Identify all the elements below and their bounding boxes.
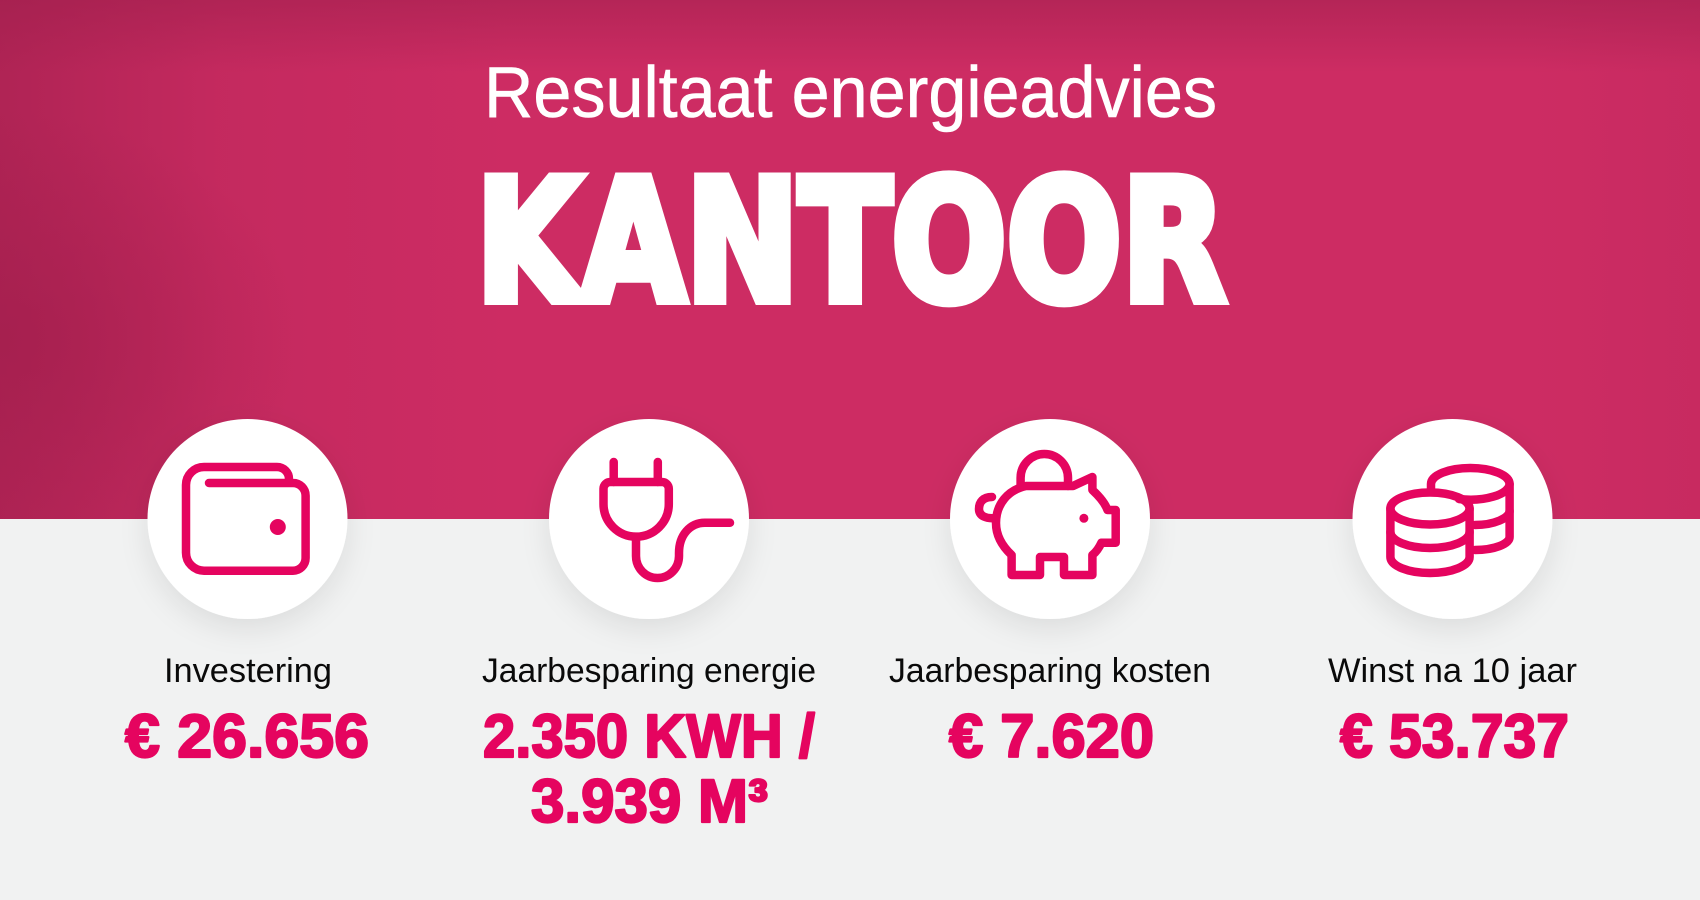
label: Investering: Investering xyxy=(164,652,332,690)
panel: Jaarbesparing energie xyxy=(482,419,816,835)
title: Resultaat energieadvies: Resultaat energieadvies xyxy=(484,53,1217,133)
circle badge: piggy bank xyxy=(950,419,1150,619)
circle badge: wallet xyxy=(148,419,348,619)
value: 2.350 kWh: 2.350 KWH / xyxy=(483,702,815,770)
value: 3.939 m3: 3.939 M³ xyxy=(531,767,768,835)
heading: KANTOOR: KANTOOR xyxy=(476,144,1226,340)
panel: Investering xyxy=(125,419,369,770)
value: € 26.656: € 26.656 xyxy=(125,702,369,770)
icon: wallet xyxy=(186,467,306,571)
label: Winst na 10 jaar: Winst na 10 jaar xyxy=(1328,652,1577,690)
circle badge: coins xyxy=(1352,419,1552,619)
panel: Jaarbesparing kosten xyxy=(889,419,1211,770)
icon: plug xyxy=(604,462,730,578)
value: € 53.737: € 53.737 xyxy=(1340,702,1569,770)
label: Jaarbesparing energie: Jaarbesparing energie xyxy=(482,652,816,690)
icon: piggy bank xyxy=(979,454,1116,575)
value: € 7.620: € 7.620 xyxy=(949,702,1154,770)
icon: coin stacks xyxy=(1390,468,1510,573)
label: Jaarbesparing kosten: Jaarbesparing kosten xyxy=(889,652,1211,690)
lower background xyxy=(0,519,1700,900)
panel: Winst na 10 jaar xyxy=(1328,419,1577,770)
header band xyxy=(0,0,1700,519)
circle badge: plug xyxy=(549,419,749,619)
